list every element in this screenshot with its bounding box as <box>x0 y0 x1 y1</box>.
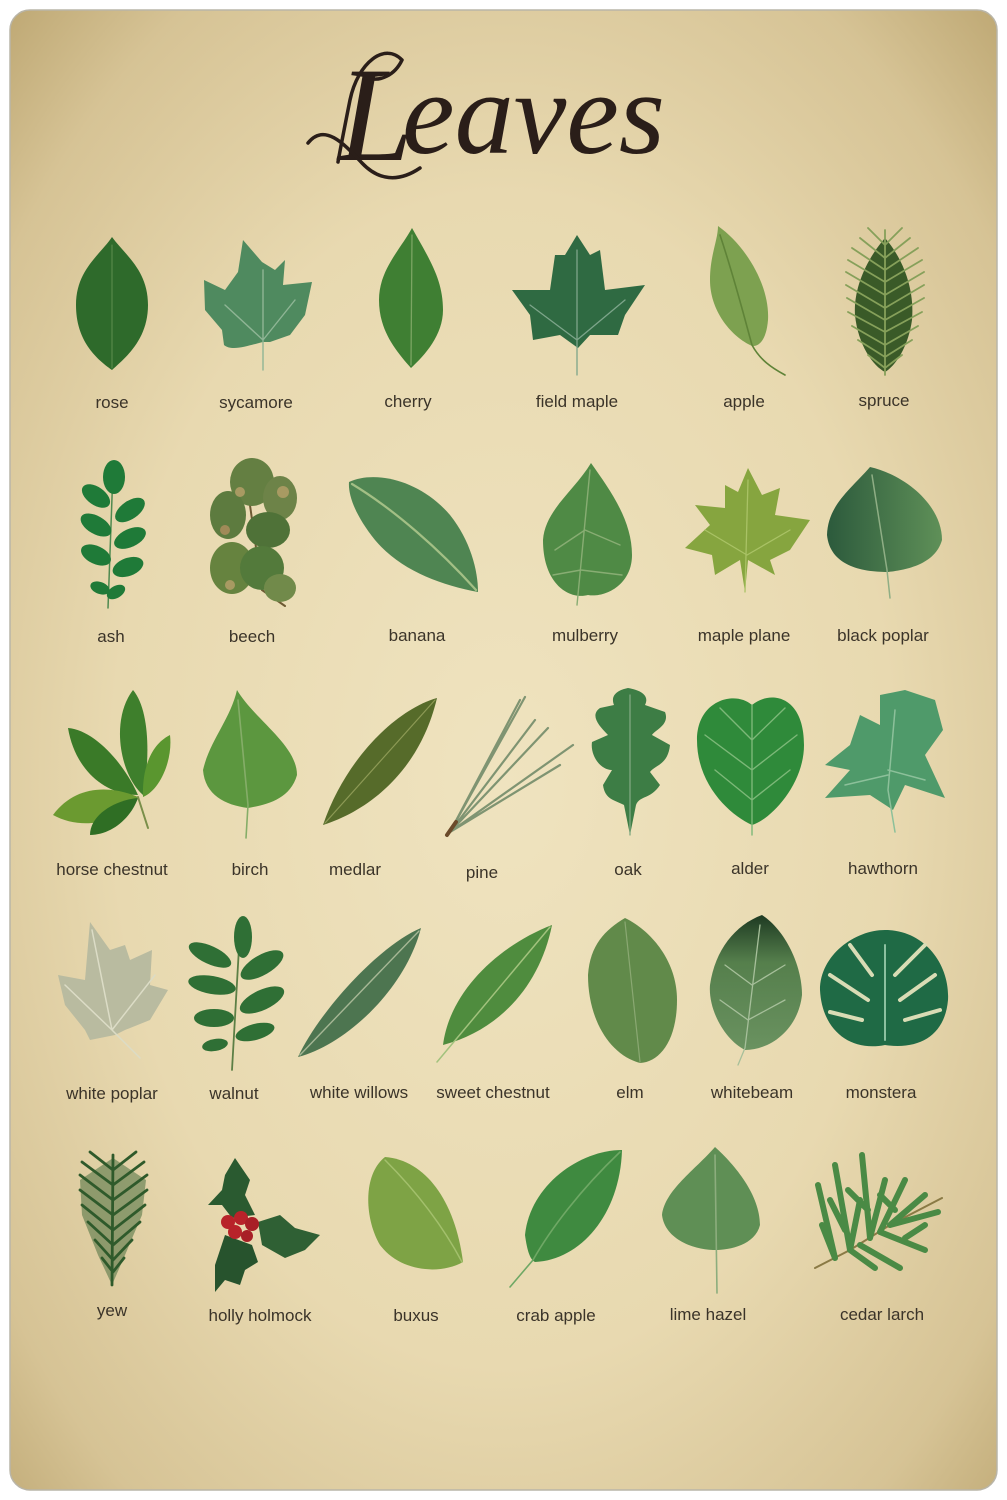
label: banana: banana <box>389 626 446 645</box>
label: horse chestnut: horse chestnut <box>56 860 168 879</box>
icon: hawthorn leaf <box>825 690 945 832</box>
leaf: birch <box>203 690 297 879</box>
icon: beech sprig <box>210 458 297 606</box>
leaf: ash <box>77 460 149 646</box>
label: cherry: cherry <box>384 392 432 411</box>
leaf: pine <box>447 697 573 882</box>
leaf: hawthorn <box>825 690 945 878</box>
icon: yew sprig <box>80 1152 147 1285</box>
label: hawthorn: hawthorn <box>848 859 918 878</box>
leaf: cedar larch <box>815 1155 942 1324</box>
label: apple: apple <box>723 392 765 411</box>
label: black poplar: black poplar <box>837 626 929 645</box>
icon: white willow leaf <box>298 928 421 1057</box>
leaf: alder <box>697 698 804 878</box>
title <box>308 41 665 190</box>
leaf: sweet chestnut <box>436 925 552 1102</box>
label: birch: birch <box>232 860 268 879</box>
label: pine: pine <box>466 863 498 882</box>
label: sycamore: sycamore <box>219 393 293 412</box>
icon: crab apple leaf <box>510 1150 622 1287</box>
label: spruce: spruce <box>858 391 910 410</box>
label: rose: rose <box>95 393 129 412</box>
label: lime hazel: lime hazel <box>670 1305 746 1324</box>
leaf: mulberry <box>543 463 632 645</box>
label: oak: oak <box>614 860 642 879</box>
label: holly holmock: holly holmock <box>208 1306 312 1325</box>
label: elm: elm <box>616 1083 644 1102</box>
leaf: maple plane <box>685 468 810 645</box>
icon: cedar sprig <box>815 1155 942 1268</box>
leaf: holly holmock <box>208 1158 320 1325</box>
label: white poplar: white poplar <box>65 1084 158 1103</box>
icon: whitebeam leaf <box>710 915 802 1065</box>
icon: black poplar leaf <box>827 467 942 598</box>
label: whitebeam: whitebeam <box>710 1083 793 1102</box>
label: medlar: medlar <box>329 860 381 879</box>
icon: field maple leaf <box>512 235 645 375</box>
icon: cherry leaf <box>379 228 443 368</box>
leaf: crab apple <box>510 1150 622 1325</box>
leaf: elm <box>588 918 677 1102</box>
label: field maple: field maple <box>536 392 618 411</box>
icon: pine needles <box>447 697 573 835</box>
leaf: field maple <box>512 235 645 411</box>
icon: alder leaf <box>697 698 804 835</box>
label: walnut: walnut <box>208 1084 259 1103</box>
label: sweet chestnut: sweet chestnut <box>436 1083 550 1102</box>
leaf: medlar <box>323 698 437 879</box>
leaf: black poplar <box>827 467 942 645</box>
leaf: banana <box>349 477 478 645</box>
label: white willows: white willows <box>309 1083 408 1102</box>
icon: walnut leaf <box>185 916 288 1070</box>
icon: white poplar leaf <box>58 922 168 1058</box>
label: crab apple: crab apple <box>516 1306 596 1325</box>
leaf: apple <box>710 226 785 411</box>
icon: elm leaf <box>588 918 677 1063</box>
icon: mulberry leaf <box>543 463 632 605</box>
icon: rose leaf <box>76 237 148 370</box>
title: L <box>336 41 413 190</box>
label: mulberry: mulberry <box>552 626 619 645</box>
leaf: monstera <box>820 930 948 1102</box>
icon: lime hazel leaf <box>662 1147 760 1293</box>
leaf: cherry <box>379 228 443 411</box>
label: alder: alder <box>731 859 769 878</box>
icon: medlar leaf <box>323 698 437 825</box>
icon: sweet chestnut leaf <box>437 925 552 1062</box>
icon: apple leaf <box>710 226 785 375</box>
label: beech: beech <box>229 627 275 646</box>
label: monstera: monstera <box>846 1083 917 1102</box>
icon: holly with berries <box>208 1158 320 1292</box>
leaf: white willows <box>298 928 421 1102</box>
icon: monstera leaf <box>820 930 948 1046</box>
icon: sycamore leaf <box>204 240 312 370</box>
icon: banana leaf <box>349 477 478 592</box>
leaf: buxus <box>368 1157 463 1325</box>
icon: maple plane leaf <box>685 468 810 592</box>
leaf: whitebeam <box>710 915 802 1102</box>
icon: oak leaf <box>592 688 670 835</box>
leaf: oak <box>592 688 670 879</box>
icon: birch leaf <box>203 690 297 838</box>
leaf: rose <box>76 237 148 412</box>
icon: spruce sprig <box>846 228 924 375</box>
leaf: yew <box>80 1152 147 1320</box>
label: cedar larch: cedar larch <box>840 1305 924 1324</box>
leaf: beech <box>210 458 297 646</box>
label: maple plane: maple plane <box>698 626 790 645</box>
icon: horse chestnut leaf <box>53 690 170 835</box>
leaf: walnut <box>185 916 288 1103</box>
label: yew: yew <box>97 1301 128 1320</box>
icon: ash leaf <box>77 460 149 608</box>
icon: buxus leaf <box>368 1157 463 1269</box>
label: buxus: buxus <box>393 1306 439 1325</box>
title: eaves <box>402 48 665 179</box>
leaf: sycamore <box>204 240 312 412</box>
leaf: white poplar <box>58 922 168 1103</box>
leaf: lime hazel <box>662 1147 760 1324</box>
leaf: horse chestnut <box>53 690 170 879</box>
label: ash: ash <box>97 627 125 646</box>
leaf: spruce <box>846 228 924 410</box>
